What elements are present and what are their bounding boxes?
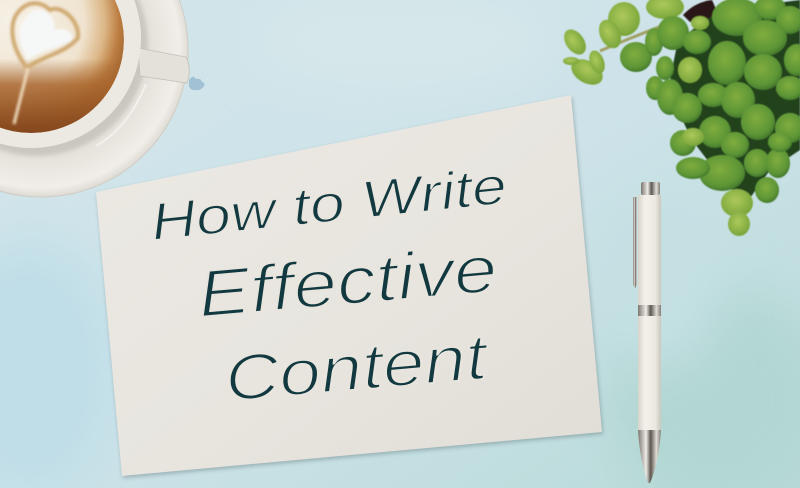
title line: Effective: Effective xyxy=(195,232,500,332)
stem xyxy=(600,22,672,51)
cup handle xyxy=(138,48,189,83)
cup shadow xyxy=(0,0,148,156)
pen tip xyxy=(638,430,661,483)
pen xyxy=(633,182,661,483)
pen ring xyxy=(638,305,661,316)
pen barrel xyxy=(638,195,661,431)
saucer well highlight xyxy=(96,84,146,146)
pot edge xyxy=(683,0,720,22)
envelope paper xyxy=(96,95,603,478)
cup rim xyxy=(0,0,141,148)
latte art heart xyxy=(12,3,78,124)
pen clip xyxy=(633,197,637,288)
coffee cup and saucer xyxy=(0,0,189,197)
saucer xyxy=(0,0,188,197)
title line: How to Write: How to Write xyxy=(148,157,509,252)
leaves xyxy=(560,0,800,236)
plant xyxy=(560,0,800,236)
pen cap top xyxy=(641,182,660,195)
plant shadow mass xyxy=(668,0,800,205)
coffee spill mark xyxy=(189,77,205,90)
title line: Content: Content xyxy=(222,320,492,415)
coffee xyxy=(0,0,124,133)
handwritten title xyxy=(148,157,509,415)
